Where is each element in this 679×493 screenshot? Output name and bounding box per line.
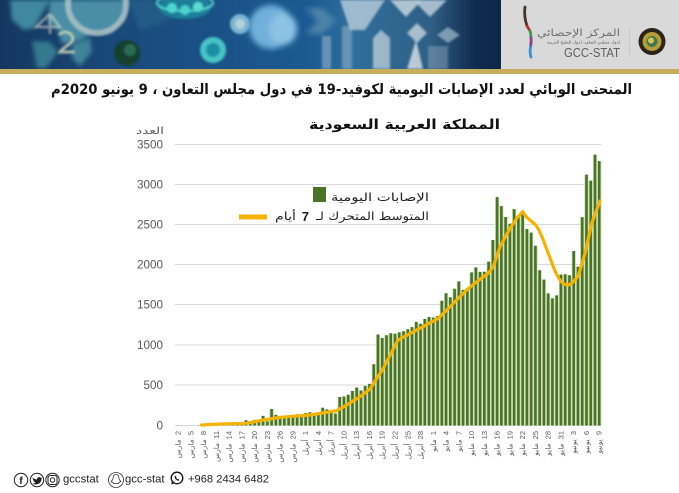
legend line: moving average [239,214,267,220]
x axis date labels: 25 أبريل [402,431,412,460]
x axis date labels: 22 مايو [518,431,527,457]
chart title: المملكة العربية السعودية [309,117,500,133]
x axis date labels: 5 مارس [186,431,195,458]
icon: facebook [14,473,28,487]
x axis date labels: 6 يونيو [582,431,591,454]
x axis date labels: 28 أبريل [415,431,425,460]
gridlines and y axis labels: 3500 [137,138,163,152]
x axis date labels: 20 مارس [250,431,259,463]
legend text: moving average: المتوسط المتحرك لـ [315,209,429,224]
world map [10,0,170,68]
arrow shape [305,8,336,34]
x axis date labels: 16 أبريل [364,431,374,460]
icon: facebook: f [19,475,23,487]
handle: gccstat: gccstat [63,474,100,486]
icon: whatsapp [171,472,183,484]
gridlines and y axis labels: 2000 [137,258,163,272]
x axis date labels: 4 مايو [442,431,451,453]
x axis date labels: 13 أبريل [351,431,361,460]
icon: snapchat [108,472,124,488]
x axis date labels: 23 مارس [263,431,272,463]
GCC emblem [638,28,666,55]
logo panel [501,0,679,69]
gridlines and y axis labels: 0 [156,420,163,432]
phone number: +968 2434 6482 [188,474,269,486]
logo swoosh [525,7,531,57]
gridlines and y axis labels: 3000 [137,178,163,192]
x axis date labels: 8 مارس [199,431,208,458]
gold band [0,69,679,74]
x axis date labels: 28 مايو [544,431,553,457]
x axis date labels: 25 مايو [531,431,540,457]
virus: small blue [230,14,250,34]
x axis date labels: 9 يونيو [595,431,604,454]
city skyline [322,0,460,69]
x axis date labels: 11 مارس [212,431,221,462]
legend text: daily cases: الإصابات اليومية [331,190,429,205]
x axis date labels: 31 مايو [556,431,566,457]
x axis date labels [174,431,604,463]
header banner [0,0,501,69]
x axis date labels: 7 مايو [454,431,463,453]
gridlines and y axis labels: 1000 [137,339,163,352]
legend text: moving average: أيام [275,209,296,223]
logo text: المركز الإحصائي [537,28,620,39]
x axis date labels: 4 أبريل [313,431,323,455]
virus: teal top [157,0,213,19]
x axis date labels: 14 مارس [225,431,234,463]
x axis date labels: 10 أبريل [338,431,348,460]
x axis date labels: 2 مارس [174,431,182,458]
gridlines and y axis labels: 1500 [137,298,163,312]
legend [239,187,429,224]
bar chart [137,138,604,463]
x axis date labels: 29 مارس [288,431,297,463]
x axis date labels: 3 يونيو [569,431,578,454]
virus: dark green [114,40,140,66]
x axis date labels: 16 مايو [493,431,502,457]
x axis date labels: 19 مايو [505,431,514,457]
x axis date labels: 17 مارس [237,431,246,463]
legend text: moving average: 7 [302,209,309,224]
ring emblem [36,0,126,52]
logo panel: لدول مجلس التعاون لدول الخليج العربية [547,40,620,44]
handle: gcc-stat: gcc-stat [125,474,165,486]
icon: instagram [46,473,59,487]
virus: large pale [249,5,297,49]
x axis date labels: 19 أبريل [377,431,387,460]
gridlines and y axis labels [137,138,601,432]
logo panel: GCC-STAT [564,46,620,60]
x axis date labels: 1 مايو [429,431,438,453]
x axis date labels: 1 أبريل [300,431,310,455]
x axis date labels: 7 أبريل [326,431,336,455]
x axis date labels: 22 أبريل [390,431,400,460]
x axis date labels: 10 مايو [467,431,476,457]
y axis title: العدد [136,126,164,137]
legend swatch: daily cases [313,187,326,202]
legend text: moving average [275,209,429,224]
gridlines and y axis labels: 2500 [137,218,163,232]
icon: twitter [30,473,44,487]
virus: teal lower [200,37,226,63]
footer contacts [14,472,269,488]
x axis date labels: 13 مايو [480,431,489,457]
daily cases bars [178,155,599,426]
x axis date labels: 26 مارس [276,431,285,463]
main title: المنحنى الوبائي لعدد الإصابات اليومية لكوفيد-19 في دول مجلس التعاون ، 9 يونيو 2020م [51,82,632,98]
gridlines and y axis labels: 500 [143,379,163,392]
moving average line [202,201,600,425]
